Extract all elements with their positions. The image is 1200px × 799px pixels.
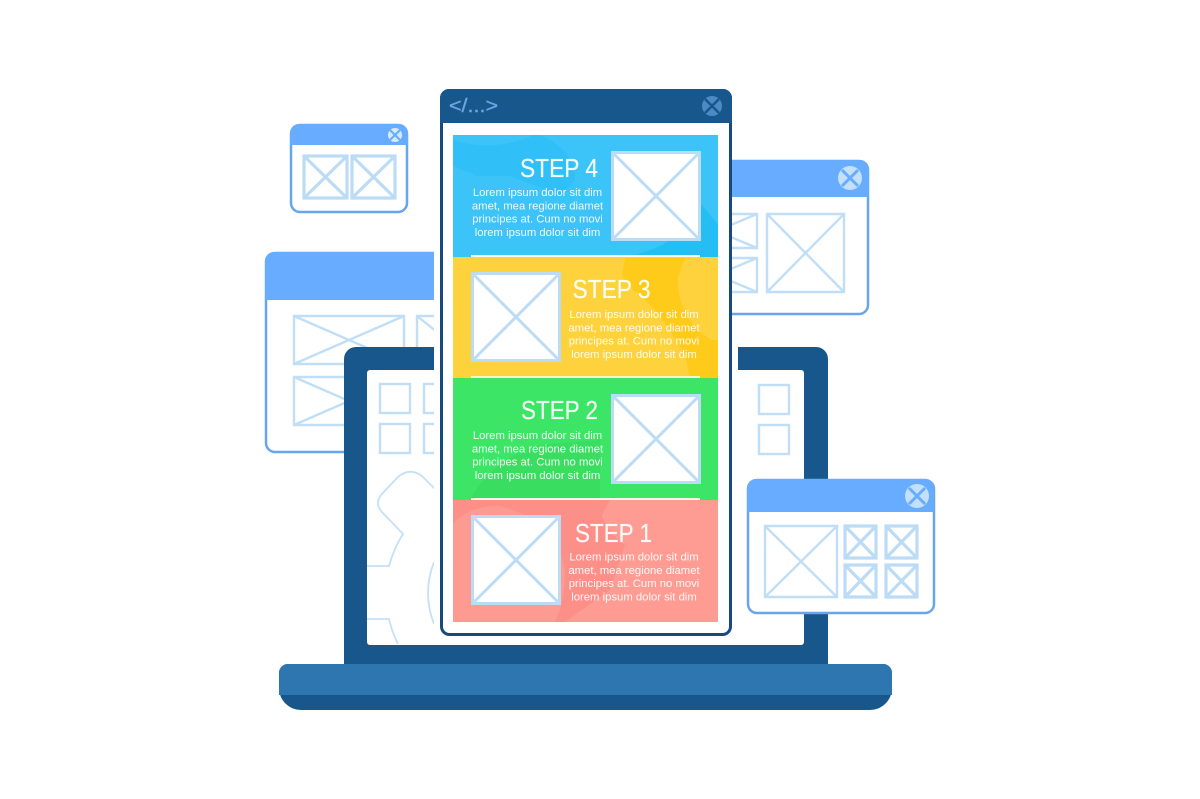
icon: close button bottom right window [905,484,929,508]
step 1 text: lorem ipsum dolor sit dim [571,592,697,604]
phone [440,89,732,634]
step 3 text: lorem ipsum dolor sit dim [571,349,697,361]
window bottom right [747,479,934,613]
step 1 text: amet, mea regione diamet [568,565,700,577]
icon: close button small window [388,128,402,142]
step 3 heading: STEP 3 [572,274,650,304]
step 2 text: lorem ipsum dolor sit dim [475,470,600,482]
step 3 image placeholder [472,274,560,360]
icon: phone close button [702,96,722,116]
code symbol: </...> [449,96,498,117]
step 3 text: amet, mea regione diamet [568,322,700,334]
panel: step 3 [453,257,718,379]
step 4 text: Lorem ipsum dolor sit dim [473,187,602,199]
small window top left [290,124,408,212]
step 1 text: Lorem ipsum dolor sit dim [569,552,699,564]
panel: step 2 [453,378,718,501]
laptop screen wireframe squares [380,384,789,454]
step 2 heading: STEP 2 [521,395,598,425]
large window left [265,252,526,452]
laptop base [279,664,892,710]
step 3 text: Lorem ipsum dolor sit dim [569,309,699,321]
step 4 text: lorem ipsum dolor sit dim [475,227,600,239]
step 4 image placeholder [612,152,700,240]
step 4 text: amet, mea regione diamet [472,200,604,212]
step 2 image placeholder [612,396,700,482]
step 1 image placeholder [472,516,560,604]
step 2 text: amet, mea regione diamet [472,443,604,455]
step 4 heading: STEP 4 [520,153,598,183]
phone header [440,89,732,123]
step 4 text: principes at. Cum no movi [472,214,603,226]
step 2 text: Lorem ipsum dolor sit dim [473,430,602,442]
step 1 heading: STEP 1 [575,518,652,548]
step 1 text: principes at. Cum no movi [569,578,699,590]
step 2 text: principes at. Cum no movi [472,457,603,469]
laptop screen [344,347,828,664]
step 3 text: principes at. Cum no movi [569,336,699,348]
icon: close button right window [838,166,862,190]
phone halo [434,84,738,644]
panel: step 1 [453,500,718,622]
laptop screen gear outline [367,472,436,644]
panel: step 4 [453,135,718,258]
window right [700,160,869,314]
